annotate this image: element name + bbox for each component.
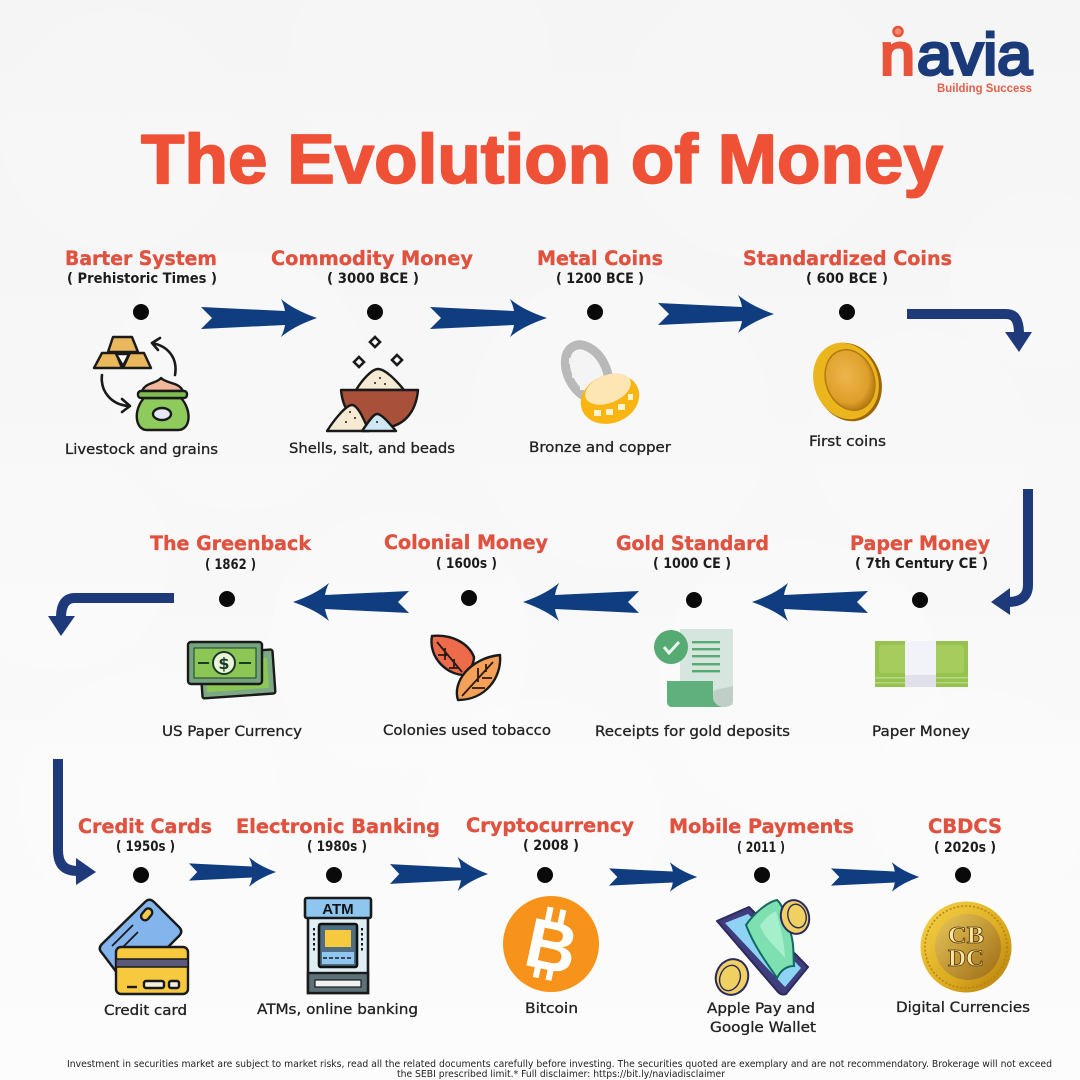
icon: bitcoin: B <box>519 903 584 990</box>
stage: Paper Money: Paper Money <box>850 532 990 555</box>
logo: Navia: n <box>880 22 915 88</box>
stage: Electronic Banking: Electronic Banking <box>236 815 440 838</box>
icon: ATM machine: ATM <box>322 901 354 918</box>
stage: Mobile Payments: Mobile Payments <box>669 815 854 838</box>
icon: credit cards <box>100 900 188 994</box>
stage: Gold Standard <box>595 532 790 740</box>
stage: Gold Standard: ( 1000 CE ) <box>653 556 731 572</box>
icon: silver and gold metal coins <box>557 337 647 432</box>
stage: Colonial Money: Colonies used tobacco <box>383 723 551 739</box>
stage: Mobile Payments: ( 2011 ) <box>737 840 785 856</box>
icon: gold bars and grain sack exchange <box>94 337 189 430</box>
icon: gold deposit receipt <box>654 629 733 707</box>
stage: Credit Cards: Credit card <box>104 1003 187 1019</box>
stage: Cryptocurrency: Cryptocurrency <box>466 814 634 837</box>
stage: Commodity Money: Shells, salt, and beads <box>289 441 455 457</box>
stage: Standardized Coins <box>743 247 952 450</box>
stage: The Greenback: US Paper Currency <box>162 724 302 740</box>
disclaimer: the SEBI prescribed limit.* Full disclaimer: https://bit.ly/naviadisclaimer <box>397 1069 725 1080</box>
icon: bowl of salt and beads <box>327 337 418 431</box>
stage: The Greenback: The Greenback <box>150 532 312 555</box>
stage: Gold Standard: Receipts for gold deposits <box>595 724 790 740</box>
icon: CBDC gold coin: CB <box>948 923 984 949</box>
icon: tobacco leaves <box>431 636 500 700</box>
arrow: colonial to greenback <box>293 583 409 621</box>
icon: banknote bundle <box>875 641 968 687</box>
stage: Cryptocurrency <box>466 814 634 1017</box>
stage: Barter System: Livestock and grains <box>65 442 218 458</box>
logo: Navia <box>880 22 1033 95</box>
stage: Colonial Money: Colonial Money <box>384 531 548 554</box>
stage: Credit Cards <box>78 815 212 1019</box>
arrow: metal to standardized <box>658 295 774 333</box>
arrow: vertical then left into row two <box>991 489 1028 615</box>
stage: Standardized Coins: ( 600 BCE ) <box>806 271 888 287</box>
caption: Apple Pay and Google Wallet: Google Wallet <box>710 1020 817 1036</box>
arrow: electronic banking to cryptocurrency <box>390 857 488 891</box>
icon: bitcoin <box>503 896 599 992</box>
stage: Paper Money <box>850 532 990 740</box>
stage: CBDCS <box>896 815 1030 1016</box>
icon: US banknotes: $ <box>218 654 230 673</box>
stage: Metal Coins: Metal Coins <box>537 247 663 270</box>
stage: Colonial Money <box>383 531 551 739</box>
stage: Barter System <box>65 247 218 458</box>
stage: Metal Coins <box>529 247 671 456</box>
stage: Colonial Money: ( 1600s ) <box>436 556 497 572</box>
stage: The Greenback <box>150 532 312 740</box>
stage: CBDCS: CBDCS <box>928 815 1002 838</box>
icon: US banknotes <box>188 642 275 698</box>
stage: The Greenback: ( 1862 ) <box>205 557 256 573</box>
stage: Paper Money: ( 7th Century CE ) <box>855 556 988 572</box>
logo: Navia: avia <box>917 22 1033 88</box>
stage: Cryptocurrency: Bitcoin <box>525 1001 578 1017</box>
stage: Mobile Payments <box>669 815 854 1036</box>
icon: phone with cash and coins <box>711 897 813 999</box>
stage: Commodity Money: ( 3000 BCE ) <box>327 271 419 287</box>
stage: Metal Coins: ( 1200 BCE ) <box>556 271 644 287</box>
stage: Commodity Money: Commodity Money <box>271 247 473 270</box>
stage: Credit Cards: Credit Cards <box>78 815 212 838</box>
stage: Barter System: Barter System <box>65 247 217 270</box>
stage: Credit Cards: ( 1950s ) <box>116 839 175 855</box>
stage: Standardized Coins: First coins <box>809 434 886 450</box>
arrow: paper to gold standard <box>752 583 868 621</box>
arrow: vertical then right into row three <box>58 759 96 885</box>
arrow: cryptocurrency to mobile payments <box>609 862 697 892</box>
arrow: bend left and down <box>48 598 174 636</box>
stage: CBDCS: Digital Currencies <box>896 1000 1030 1016</box>
arrow: gold standard to colonial <box>523 583 639 621</box>
caption: Apple Pay and Google Wallet <box>707 1001 817 1036</box>
logo: Navia: Building Success <box>937 81 1032 95</box>
disclaimer <box>67 1059 1052 1080</box>
stage: Metal Coins: Bronze and copper <box>529 440 671 456</box>
stage: Standardized Coins: Standardized Coins <box>743 247 952 270</box>
arrow: barter to commodity <box>201 299 317 337</box>
icon: ATM machine <box>305 898 371 993</box>
stage: Electronic Banking <box>236 815 440 1018</box>
caption: Apple Pay and Google Wallet: Apple Pay and <box>707 1001 815 1017</box>
stage: CBDCS: ( 2020s ) <box>934 840 996 856</box>
stage: Cryptocurrency: ( 2008 ) <box>523 838 579 854</box>
icon: CBDC gold coin <box>920 902 1012 992</box>
stage: Gold Standard: Gold Standard <box>616 532 769 555</box>
stage: Paper Money: Paper Money <box>872 724 970 740</box>
arrow: mobile payments to CBDCs <box>831 862 919 892</box>
icon: CBDC gold coin: DC <box>948 946 984 972</box>
arrow: credit cards to electronic banking <box>189 857 276 887</box>
disclaimer: Investment in securities market are subject to market risks, read all the related documents carefully before investing. The securities quoted are exemplary and are not recommendatory. Brokerage will not exceed <box>67 1059 1052 1070</box>
stage: Barter System: ( Prehistoric Times ) <box>67 271 217 287</box>
title: The Evolution of Money <box>141 120 943 198</box>
stage: Electronic Banking: ATMs, online banking <box>257 1002 418 1018</box>
stage: Commodity Money <box>271 247 473 457</box>
stage: Electronic Banking: ( 1980s ) <box>307 839 367 855</box>
icon: gold coin <box>803 333 893 431</box>
arrow: commodity to metal <box>430 299 547 337</box>
arrow: bend right and down <box>907 314 1032 352</box>
